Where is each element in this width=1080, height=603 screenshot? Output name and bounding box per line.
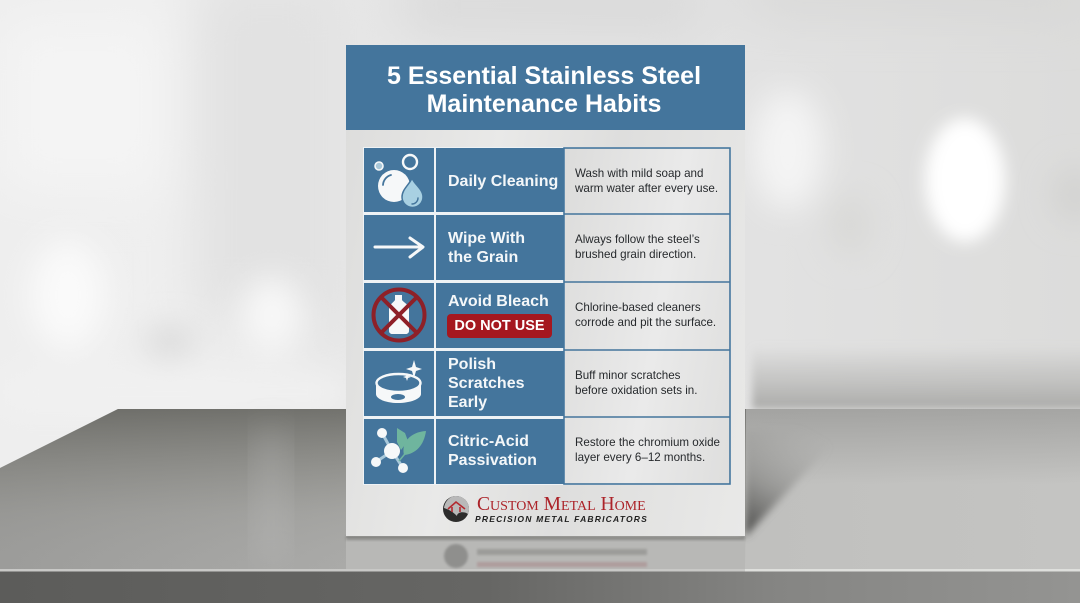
icon: polish tin with sparkles [375,360,422,403]
text: daily cleaning description: Wash with mild soap and [575,167,703,180]
row 4 icon cell [364,351,434,416]
brand name: Custom Metal Home [477,494,646,515]
text: polish description [575,369,697,397]
icon: arrow right [374,236,425,259]
heading: avoid bleach: Avoid Bleach [448,293,549,310]
text: passivation description [575,436,720,464]
heading: citric-acid passivation: Citric-Acid [448,433,529,450]
icon: soap bubbles and water drop [374,154,422,207]
heading: citric-acid passivation [448,433,537,469]
steel counter top [0,409,1080,570]
logo: custom metal home [443,494,648,524]
text: wipe description: Always follow the steel’s [575,233,700,246]
icon: molecule and leaves [371,428,426,473]
text: polish description: Buff minor scratches [575,369,680,382]
heading: wipe with the grain: the Grain [448,249,518,266]
heading: polish scratches early [448,356,524,411]
heading: polish scratches early: Early [448,394,487,411]
text: daily cleaning description: warm water after every use. [575,182,718,195]
heading: citric-acid passivation: Passivation [448,452,537,469]
text: passivation description: layer every 6–12 months. [575,451,705,464]
text: polish description: before oxidation sets in. [575,384,697,397]
table of habits [363,147,731,485]
tagline: PRECISION METAL FABRICATORS [475,514,648,524]
badge: do not use [447,314,552,338]
text: bleach description: Chlorine-based cleaners [575,301,701,314]
sign panel [346,45,745,536]
text: wipe description: brushed grain direction. [575,248,696,261]
heading: daily cleaning: Daily Cleaning [448,173,558,190]
header band with title [346,45,745,130]
counter front edge [0,571,1080,603]
row 1 icon cell [364,148,434,212]
right column background [565,148,730,484]
row 3 title cell [436,283,564,348]
title: 5 Essential Stainless Steel [387,62,701,90]
table grid lines [563,147,731,485]
title: Maintenance Habits [427,90,661,118]
heading: wipe with the grain: Wipe With [448,230,525,247]
icon: logo mark [443,496,469,522]
icon: bleach bottle prohibited [372,288,426,342]
row 2 title cell [436,215,564,280]
text: wipe description [575,233,700,261]
text: bleach description [575,301,716,329]
row 1 title cell [436,148,564,212]
background shelf band [752,345,1080,409]
text: bleach description: corrode and pit the surface. [575,316,716,329]
heading: polish scratches early: Polish [448,356,496,373]
sign reflection [346,536,745,569]
row 4 title cell [436,351,564,416]
text: passivation description: Restore the chromium oxide [575,436,720,449]
title [387,62,701,118]
heading: polish scratches early: Scratches [448,375,524,392]
counter highlight band [258,430,284,560]
row 2 icon cell [364,215,434,280]
cast shadow right of sign [745,430,845,536]
badge: do not use: DO NOT USE [454,318,545,334]
row 5 icon cell [364,419,434,484]
text: daily cleaning description [575,167,718,195]
heading: wipe with the grain [448,230,525,266]
row 5 title cell [436,419,564,484]
row 3 icon cell [364,283,434,348]
